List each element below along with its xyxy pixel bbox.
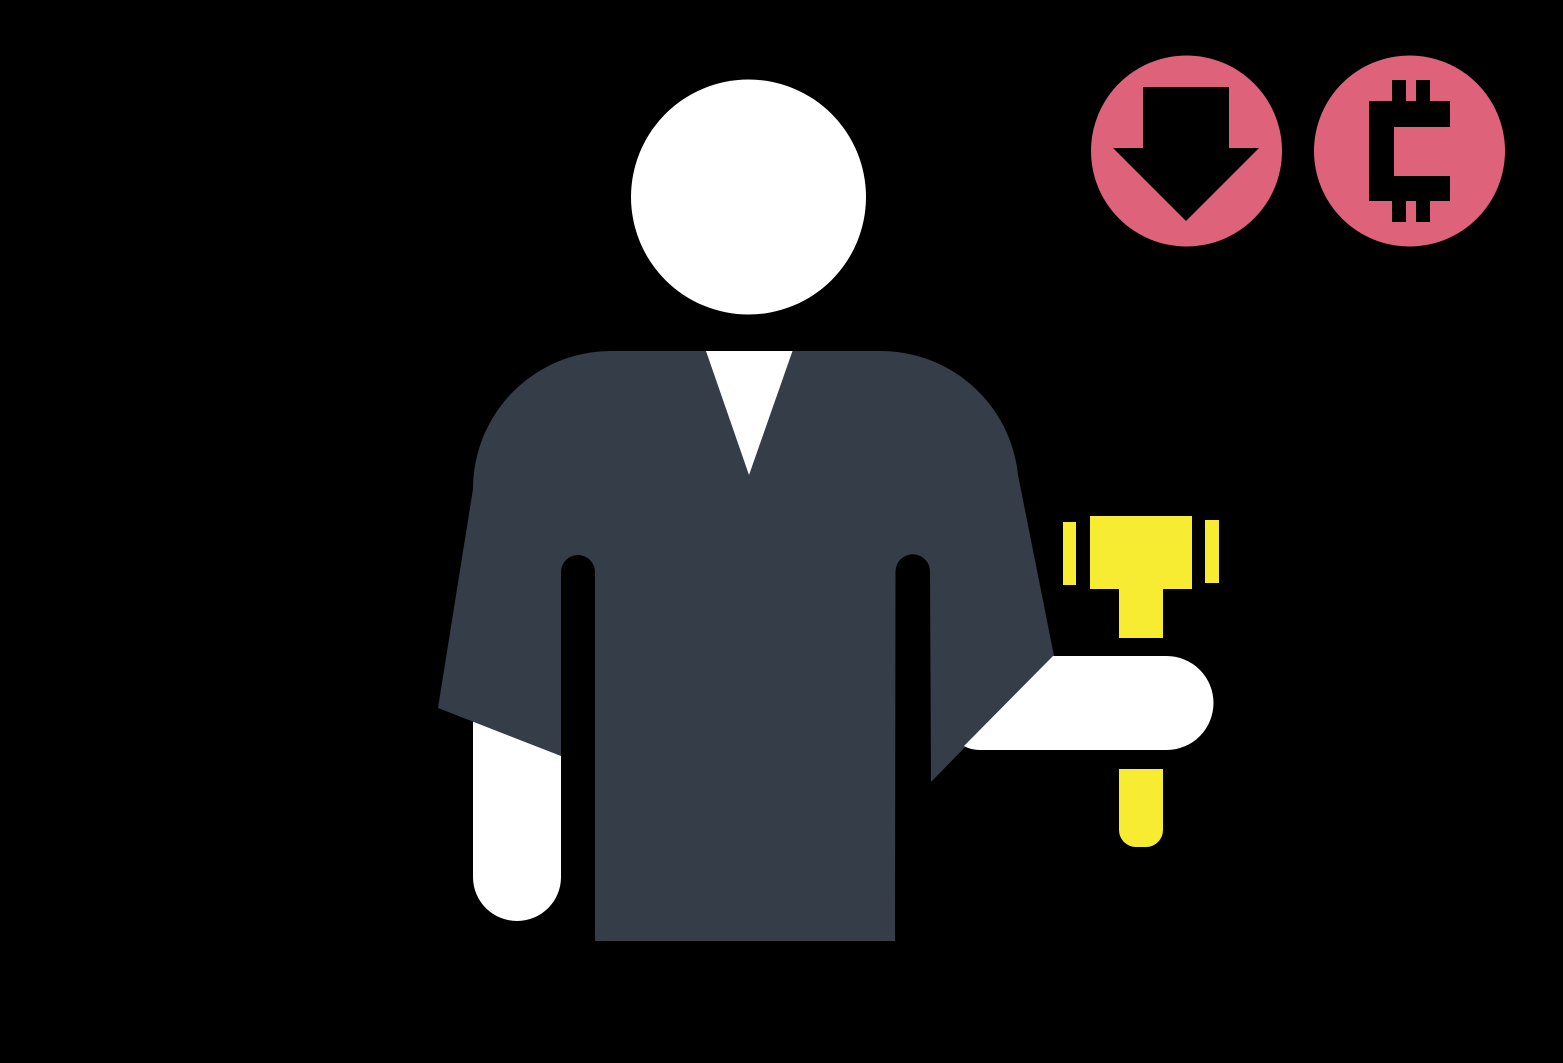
- right forearm and hand: [964, 656, 1214, 750]
- icon: gavel: [1063, 516, 1219, 847]
- torso with sleeves: [438, 351, 1054, 941]
- left forearm: [473, 700, 561, 921]
- icon: person head: [631, 80, 866, 314]
- icon: bitcoin badge: [1314, 56, 1505, 246]
- shirt collar: [706, 351, 792, 475]
- icon: down arrow badge: [1091, 56, 1282, 246]
